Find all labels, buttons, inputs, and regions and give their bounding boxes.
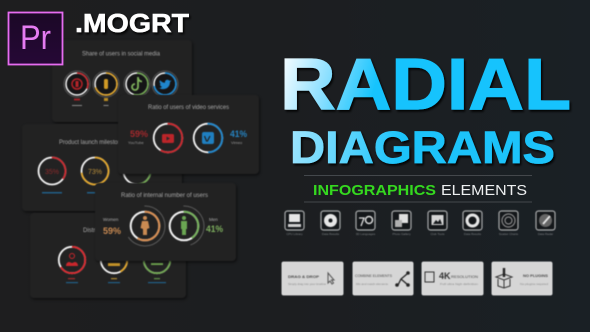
stat: women: 59% bbox=[103, 226, 122, 237]
heading: .MOGRT: .MOGRT bbox=[75, 8, 189, 38]
icon: premiere pro logo: Pr bbox=[20, 19, 51, 57]
badge: combine elements: Mix and match elements bbox=[356, 282, 389, 286]
ring: launch green bbox=[124, 158, 150, 184]
badge: drag and drop: DRAG & DROP bbox=[288, 275, 320, 279]
icon: library bbox=[285, 211, 304, 236]
panel heading: distribution: Distribution bbox=[83, 228, 113, 234]
ring: launch yellow: 73% bbox=[88, 169, 102, 176]
icon: donut: Data Results bbox=[464, 232, 482, 236]
icon: concentric circles: Scatter Charts bbox=[499, 232, 519, 236]
icon: library: CPU Library bbox=[286, 232, 303, 236]
badge: 4K resolution: RESOLUTION bbox=[451, 275, 478, 279]
icon: gear chart: 3D Languages bbox=[356, 232, 376, 236]
badge: 4K resolution: Full ultra high definition bbox=[440, 282, 479, 286]
panel: ratio of internal number of users bbox=[95, 183, 236, 261]
panel: distribution bbox=[30, 213, 186, 298]
subtitle: infographics: INFOGRAPHICS bbox=[313, 182, 436, 199]
ring: youtube bbox=[154, 124, 182, 152]
icon: image bbox=[428, 211, 447, 236]
ring: distribution green bbox=[144, 247, 170, 283]
ring: launch yellow bbox=[82, 158, 108, 194]
ring: distribution yellow bbox=[101, 247, 127, 283]
icon: photo gallery: Photo Gallery bbox=[392, 232, 411, 236]
ring: men bbox=[164, 206, 204, 246]
subtitle: elements: ELEMENTS bbox=[441, 182, 527, 199]
icon: donut bbox=[463, 211, 482, 236]
stat: men bbox=[206, 217, 223, 234]
ring: twitter bbox=[152, 71, 178, 97]
stat: women: Women bbox=[103, 217, 119, 222]
panel heading: internal users: Ratio of internal number of users bbox=[121, 193, 208, 199]
ring: launch red bbox=[38, 158, 66, 194]
badge: no plugins: No plugins required bbox=[520, 282, 549, 286]
panel: ratio of users of video services bbox=[118, 95, 259, 174]
stat: youtube bbox=[128, 129, 148, 145]
badge: no plugins bbox=[492, 262, 552, 295]
icon: wheel: Data Results bbox=[322, 232, 340, 236]
stat: vimeo: Vimeo bbox=[231, 140, 243, 145]
title: DIAGRAMS: DIAGRAMS bbox=[290, 122, 555, 173]
panel heading: video services: Ratio of users of video services bbox=[148, 105, 229, 111]
badge: combine elements: COMBINE ELEMENTS bbox=[355, 274, 392, 278]
badge: drag and drop: Simply drag into your timeline bbox=[288, 282, 327, 286]
ring: women bbox=[125, 206, 165, 246]
ring: launch red: 35% bbox=[45, 169, 59, 176]
stat: men: Men bbox=[209, 217, 218, 222]
icon: photo gallery bbox=[392, 211, 411, 236]
title: RADIAL: RADIAL bbox=[280, 45, 571, 125]
icon: concentric circles bbox=[499, 211, 519, 236]
ring: distribution red bbox=[59, 247, 85, 283]
stat: youtube: YouTube bbox=[128, 140, 144, 145]
ring: pinterest bbox=[64, 71, 90, 106]
panel heading: product launch: Product launch milestones bbox=[59, 140, 127, 146]
stat: men: 41% bbox=[206, 224, 223, 234]
ring: snapchat bbox=[93, 71, 119, 106]
panel: share of users in social media bbox=[52, 40, 192, 122]
icon: radar bbox=[536, 211, 555, 236]
stat: vimeo bbox=[230, 129, 247, 145]
stat: youtube: 59% bbox=[130, 129, 148, 139]
badge: 4K resolution: 4K bbox=[439, 271, 451, 281]
ring: tiktok bbox=[124, 71, 150, 97]
badge: no plugins: NO PLUGINS bbox=[523, 274, 548, 278]
badge: 4K resolution bbox=[422, 262, 483, 295]
icon: radar: Data Radar bbox=[538, 232, 553, 236]
badge: combine elements bbox=[353, 262, 413, 295]
icon row bbox=[285, 211, 555, 236]
stat: vimeo: 41% bbox=[230, 129, 247, 139]
ring: vimeo bbox=[194, 124, 222, 152]
icon: premiere pro logo bbox=[8, 12, 62, 64]
badge: drag and drop bbox=[282, 262, 343, 295]
stat: women bbox=[103, 217, 122, 237]
icon: image: Club Tools bbox=[431, 232, 445, 236]
icon: gear chart bbox=[356, 211, 376, 236]
icon: wheel bbox=[321, 211, 340, 236]
panel: product launch milestones bbox=[22, 124, 182, 211]
panel heading: social media: Share of users in social media bbox=[82, 52, 161, 58]
